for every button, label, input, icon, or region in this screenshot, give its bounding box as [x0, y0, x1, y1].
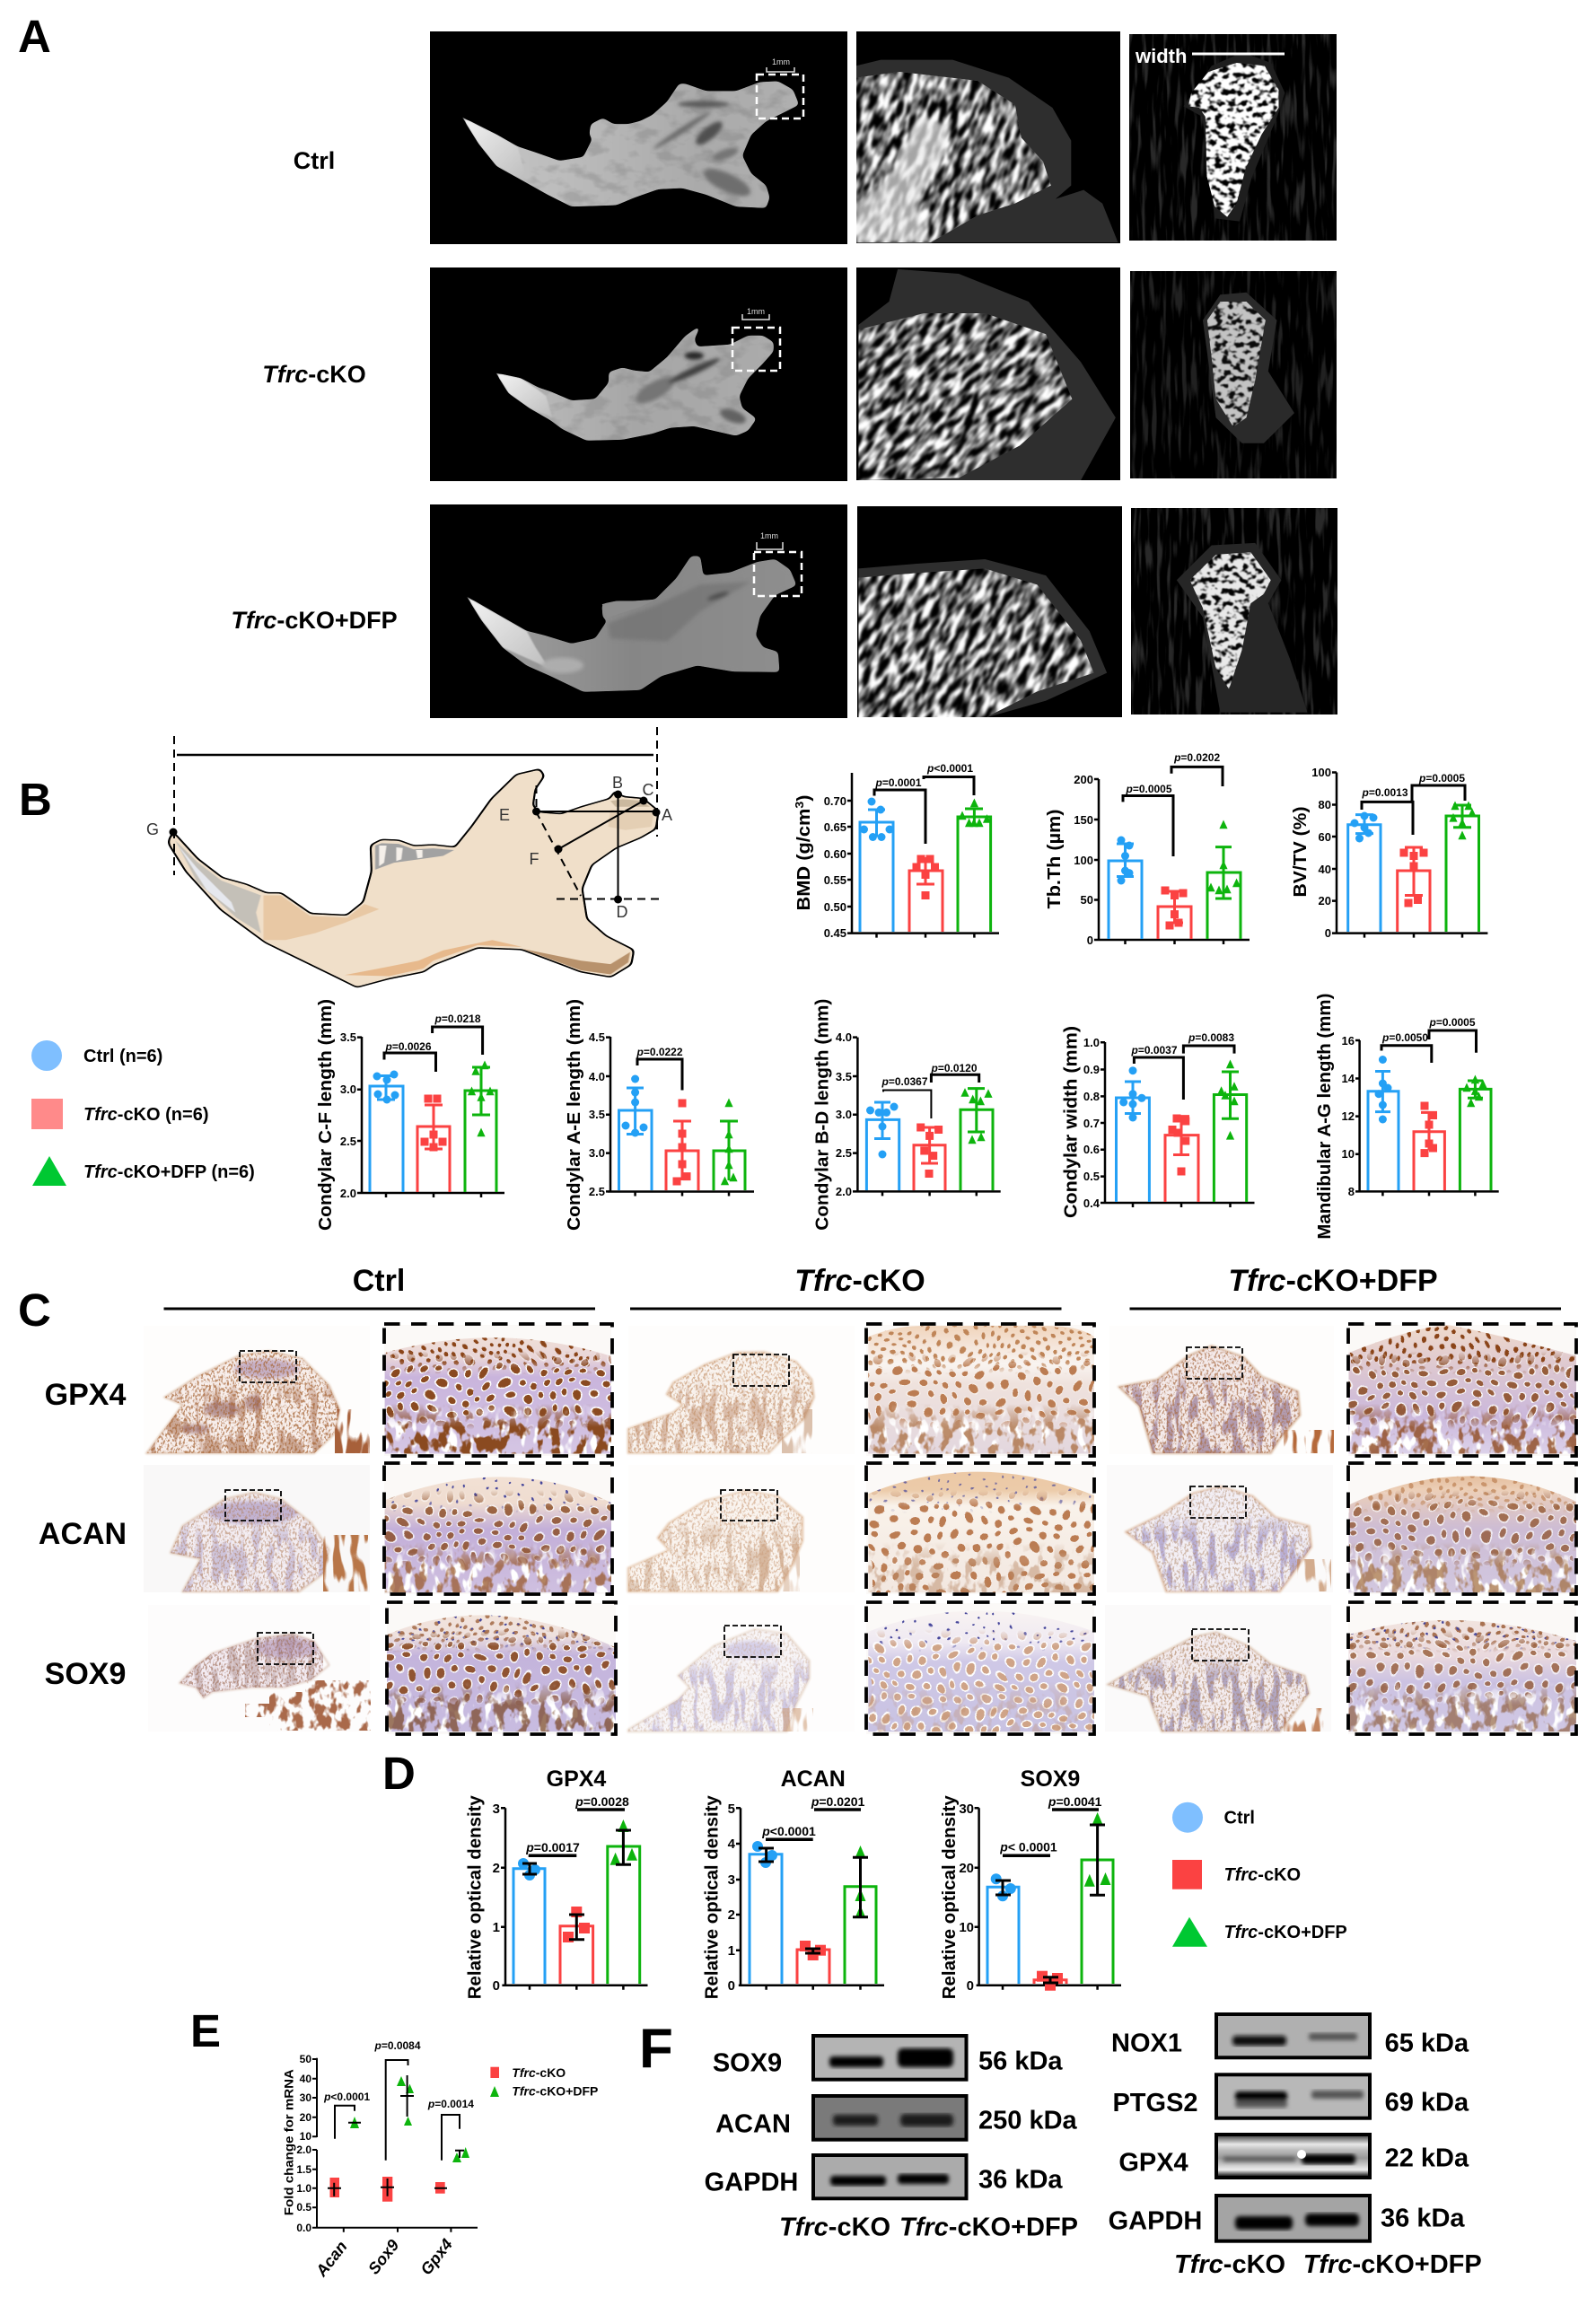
panel: B measurement diagram	[19, 727, 672, 986]
tick labels: 0.65	[824, 820, 846, 834]
tick labels: 14	[1342, 1072, 1355, 1085]
tick labels	[493, 1802, 500, 1994]
tick labels: 200	[1074, 773, 1093, 786]
y axis title: Relative optical density	[466, 1794, 486, 1999]
image: Tfrc-cKO condyle sagittal	[856, 267, 1120, 480]
SOX9 Tfrc-cKO magnified	[866, 1602, 1094, 1734]
error bars	[328, 2075, 464, 2196]
chart title: SOX9	[1021, 1767, 1080, 1792]
legend Tfrc-cKO+DFP	[32, 1156, 255, 1186]
significance brackets	[881, 1062, 979, 1118]
significance brackets: p=0.0005	[1125, 783, 1172, 795]
measurement lines and dashes	[174, 727, 664, 899]
data points	[866, 1088, 993, 1178]
legend Ctrl: Ctrl	[1224, 1809, 1255, 1828]
tick labels: 0.8	[1083, 1090, 1100, 1103]
row label: ACAN: ACAN	[39, 1517, 127, 1551]
SOX9 Tfrc-cKO+DFP magnified	[1348, 1602, 1576, 1734]
tick labels: 10	[959, 1920, 974, 1935]
tick labels: 2	[493, 1861, 500, 1876]
red data markers	[330, 2177, 445, 2202]
bars	[866, 1089, 993, 1190]
bar chart: GPX4 optical density	[466, 1767, 648, 1999]
significance bars: p=0.0041	[1048, 1794, 1102, 1809]
green data markers	[350, 2076, 469, 2162]
panel letter B: B	[19, 774, 52, 825]
landmark labels	[146, 774, 672, 921]
SOX9 Tfrc-cKO overview	[628, 1605, 855, 1732]
tick labels	[1311, 766, 1331, 940]
tick labels: 40	[1319, 863, 1331, 876]
tick labels: 4	[728, 1837, 736, 1852]
significance brackets: p=0.0202	[1173, 751, 1220, 764]
significance bracket: p=0.0222	[636, 1046, 683, 1058]
ACAN Ctrl magnified	[384, 1463, 612, 1594]
axes	[1355, 1040, 1499, 1196]
tick labels: 3	[493, 1802, 500, 1817]
tick labels: 20	[959, 1861, 974, 1876]
x axis labels	[311, 2235, 456, 2281]
blot lane labels right: Tfrc-cKO	[1174, 2250, 1285, 2279]
tick labels: 2.5	[589, 1185, 605, 1198]
significance bracket	[636, 1046, 683, 1090]
significance brackets: p=0.0014	[427, 2098, 474, 2110]
panel letter A: A	[18, 11, 51, 62]
legend: Tfrc-cKO+DFP	[512, 2084, 598, 2099]
tick labels: 2.0	[340, 1187, 356, 1200]
panel letter D: D	[382, 1748, 416, 1799]
significance brackets: p=0.0084	[373, 2039, 421, 2052]
SOX9 Tfrc-cKO+DFP overview	[1105, 1605, 1331, 1732]
legend Tfrc-cKO+DFP: Tfrc-cKO+DFP	[1224, 1923, 1347, 1942]
legend Tfrc-cKO: Tfrc-cKO (n=6)	[83, 1105, 208, 1125]
tick labels	[589, 1030, 605, 1198]
GAPDH blot right	[1109, 2194, 1465, 2243]
significance brackets: p=0.0005	[1428, 1016, 1476, 1029]
tick labels: 8	[1348, 1185, 1355, 1198]
y axis title: Condylar width (mm)	[1061, 1026, 1081, 1218]
axes	[975, 1808, 1121, 1990]
axes	[606, 1037, 754, 1196]
significance brackets: p=0.0083	[1188, 1031, 1234, 1044]
GPX4 Ctrl overview	[145, 1348, 370, 1456]
tick labels: 3	[728, 1872, 735, 1888]
tick labels: 0	[1325, 926, 1331, 940]
significance brackets: p<0.0001	[926, 762, 973, 775]
axes	[1332, 772, 1487, 938]
GPX4 blot	[1118, 2133, 1469, 2179]
significance brackets: p=0.0050	[1381, 1031, 1428, 1044]
bars	[370, 1067, 496, 1192]
error bars	[759, 1848, 868, 1953]
tick labels: 10	[1342, 1147, 1355, 1161]
significance brackets: p=0.0013	[1361, 786, 1408, 799]
axes	[357, 1037, 504, 1197]
GPX4 Tfrc-cKO+DFP overview	[1117, 1344, 1334, 1456]
legend	[490, 2065, 598, 2099]
bars	[1109, 844, 1241, 939]
data points	[1375, 1056, 1487, 1157]
y axis title: Condylar A-E length (mm)	[565, 999, 584, 1231]
ACAN Tfrc-cKO+DFP magnified	[1348, 1463, 1576, 1594]
tick labels: 3.5	[589, 1108, 605, 1121]
significance brackets: p=0.0026	[384, 1040, 432, 1053]
NOX1 blot	[1111, 2012, 1469, 2059]
data points	[860, 797, 991, 899]
bars	[1348, 805, 1479, 932]
image: Ctrl whole mandible: 1mm	[772, 57, 790, 66]
data points	[518, 1819, 637, 1942]
tick labels: 16	[1342, 1034, 1355, 1048]
NOX1 blot: 65 kDa	[1385, 2029, 1469, 2057]
tick labels: 0.55	[824, 873, 846, 887]
legend Tfrc-cKO	[31, 1099, 208, 1129]
tick labels: 3.0	[589, 1146, 605, 1160]
significance brackets: p=0.0218	[434, 1013, 481, 1025]
tick labels: 0	[967, 1978, 974, 1994]
ACAN Ctrl overview	[168, 1489, 368, 1594]
GPX4 Tfrc-cKO+DFP magnified	[1348, 1324, 1576, 1456]
row label: SOX9: SOX9	[45, 1657, 126, 1691]
landmark labels: C	[643, 781, 653, 799]
data points	[1119, 1059, 1239, 1176]
landmark labels: B	[612, 774, 623, 792]
mandible illustration	[170, 770, 657, 986]
error bars	[522, 1830, 631, 1940]
bar chart: Condylar width	[1061, 1026, 1255, 1218]
legend: panel B groups	[31, 1040, 255, 1186]
tick labels: 5	[728, 1802, 735, 1817]
tick labels: 30	[300, 2091, 311, 2104]
bars	[750, 1854, 876, 1984]
image: Tfrc-cKO whole mandible	[430, 267, 847, 481]
significance brackets	[874, 762, 974, 844]
image: Tfrc-cKO whole mandible: 1mm	[747, 307, 765, 316]
axes	[501, 1808, 648, 1990]
GPX4 blot: GPX4	[1118, 2149, 1188, 2178]
GAPDH blot left	[705, 2153, 1063, 2200]
significance bars	[761, 1794, 865, 1839]
SOX9 Ctrl magnified	[387, 1602, 616, 1734]
GPX4 Tfrc-cKO magnified	[866, 1324, 1094, 1456]
PTGS2 blot: PTGS2	[1112, 2089, 1198, 2117]
image: Ctrl condyle coronal with width bar	[1129, 34, 1337, 241]
tick labels: 4.0	[836, 1030, 852, 1044]
tick labels: 4.5	[589, 1030, 605, 1044]
SOX9 blot	[713, 2034, 1063, 2082]
blot lane labels right	[1174, 2250, 1482, 2279]
blot lane labels left	[779, 2214, 1078, 2242]
ACAN blot: 250 kDa	[978, 2106, 1078, 2135]
western blots right	[1109, 2012, 1482, 2279]
landmark labels: A	[662, 806, 672, 824]
significance brackets	[323, 2039, 474, 2161]
western blots left	[705, 2034, 1078, 2242]
ACAN Tfrc-cKO+DFP overview	[1123, 1485, 1331, 1594]
tick labels: 0.5	[1083, 1170, 1100, 1183]
tick labels	[728, 1802, 736, 1994]
bars	[1368, 1072, 1491, 1190]
legend Tfrc-cKO+DFP	[1172, 1917, 1347, 1947]
significance brackets	[1123, 751, 1223, 856]
tick labels: 0	[1087, 934, 1093, 947]
tick labels: 0	[493, 1978, 500, 1994]
tick labels: 0.50	[824, 900, 846, 914]
bar chart: Mandibular A-G length	[1315, 994, 1499, 1240]
tick labels: 1	[493, 1920, 500, 1935]
PTGS2 blot	[1112, 2073, 1469, 2120]
significance brackets	[1130, 1031, 1234, 1100]
tick labels: 2.5	[340, 1135, 356, 1148]
significance brackets: p=0.0001	[874, 776, 922, 789]
SOX9 Ctrl overview	[178, 1632, 371, 1731]
data points	[991, 1812, 1111, 1991]
bars	[619, 1088, 745, 1190]
bar chart: BV/TV	[1291, 766, 1487, 940]
row label: Ctrl: Ctrl	[294, 147, 335, 174]
y axis title: Fold change for mRNA	[282, 2069, 296, 2215]
image: Ctrl condyle sagittal	[856, 31, 1120, 243]
tick labels: 0.4	[1083, 1197, 1101, 1210]
tick labels: 0.6	[1083, 1143, 1100, 1156]
axes	[847, 773, 999, 938]
panel letter C: C	[18, 1284, 51, 1336]
tick labels: 1.0	[1083, 1036, 1100, 1049]
x axis labels: Gpx4	[417, 2235, 456, 2278]
blot lane labels left: Tfrc-cKO+DFP	[899, 2214, 1078, 2242]
GAPDH blot right: 36 kDa	[1381, 2205, 1465, 2233]
tick labels	[1342, 1034, 1355, 1198]
bar chart: Tb.Th	[1045, 751, 1250, 947]
y axis title: BMD (g/cm	[794, 817, 814, 910]
bar chart: Condylar A-E length	[565, 999, 754, 1231]
blot lane labels left: Tfrc-cKO	[779, 2214, 890, 2242]
tick labels	[824, 794, 846, 940]
tick labels: 100	[1074, 854, 1093, 867]
axes	[1101, 1042, 1255, 1207]
ACAN Tfrc-cKO overview	[627, 1488, 804, 1594]
data points	[373, 1061, 495, 1151]
significance bars	[525, 1794, 629, 1855]
significance bars: p=0.0017	[525, 1840, 580, 1854]
bars	[513, 1846, 640, 1984]
image: Ctrl condyle coronal with width bar: width	[1135, 45, 1187, 67]
GPX4 Tfrc-cKO overview	[627, 1350, 816, 1455]
GPX4 blot: 22 kDa	[1385, 2144, 1469, 2172]
legend Tfrc-cKO+DFP: Tfrc-cKO+DFP (n=6)	[83, 1162, 255, 1182]
error bars	[995, 1825, 1105, 1983]
tick labels	[296, 2053, 311, 2234]
tick labels: 2.5	[836, 1146, 852, 1160]
image: Tfrc-cKO+DFP whole mandible: 1mm	[760, 531, 778, 540]
tick labels: 0.7	[1083, 1117, 1100, 1130]
legend: panel D groups	[1172, 1802, 1347, 1947]
y axis title: Condylar B-D length (mm)	[813, 999, 833, 1231]
axes	[853, 1038, 1001, 1196]
row label: Tfrc-cKO: Tfrc-cKO	[262, 361, 366, 388]
tick labels	[340, 1030, 356, 1200]
significance brackets	[1381, 1016, 1476, 1063]
tick labels: 12	[1342, 1109, 1355, 1123]
data points	[621, 1075, 738, 1185]
bar chart: BMD	[793, 762, 999, 940]
y axis title: 3	[793, 802, 806, 809]
legend Ctrl: Ctrl (n=6)	[83, 1047, 162, 1066]
axes	[1094, 779, 1250, 944]
GAPDH blot right: GAPDH	[1109, 2206, 1202, 2235]
tick labels: 4.0	[589, 1070, 605, 1083]
broken axes	[312, 2058, 478, 2232]
row label: GPX4: GPX4	[45, 1378, 126, 1412]
GPX4 Ctrl magnified	[384, 1324, 612, 1456]
landmark labels: D	[616, 903, 628, 921]
tick labels: 50	[1081, 893, 1093, 907]
GAPDH blot left: 36 kDa	[978, 2165, 1063, 2194]
tick labels	[1074, 773, 1093, 947]
panel: C immunohistochemistry	[18, 1264, 1576, 1734]
data points	[1117, 820, 1241, 930]
image: Tfrc-cKO+DFP condyle coronal	[1131, 508, 1337, 715]
bars	[860, 809, 991, 932]
tick labels: 80	[1319, 798, 1331, 811]
chart title: GPX4	[547, 1767, 606, 1792]
column heading: Tfrc-cKO: Tfrc-cKO	[794, 1264, 925, 1298]
tick labels: 100	[1311, 766, 1331, 779]
landmark labels: F	[530, 850, 539, 868]
bar chart: ACAN optical density	[703, 1767, 884, 1999]
tick labels: 0.5	[296, 2201, 311, 2214]
image: Tfrc-cKO+DFP condyle sagittal	[857, 506, 1122, 717]
tick labels: 3.5	[340, 1030, 356, 1044]
legend Ctrl	[31, 1040, 162, 1071]
legend Ctrl	[1172, 1802, 1255, 1833]
significance brackets	[1361, 772, 1465, 835]
tick labels	[1083, 1036, 1101, 1210]
y axis title: BV/TV (%)	[1291, 806, 1311, 898]
significance bars	[999, 1794, 1102, 1855]
tick labels: 20	[1319, 894, 1331, 907]
tick labels: 0.70	[824, 794, 846, 808]
tick labels: 1.5	[296, 2163, 311, 2176]
tick labels: 60	[1319, 830, 1331, 844]
chart title: ACAN	[781, 1767, 846, 1792]
data points	[1350, 801, 1477, 907]
image: Ctrl whole mandible	[430, 31, 847, 244]
column heading: Ctrl: Ctrl	[353, 1264, 405, 1298]
tick labels: 150	[1074, 813, 1093, 827]
blot lane labels right: Tfrc-cKO+DFP	[1303, 2250, 1482, 2279]
column heading: Tfrc-cKO+DFP: Tfrc-cKO+DFP	[1228, 1264, 1438, 1298]
tick labels: 30	[959, 1802, 974, 1817]
x axis labels: Acan	[311, 2238, 351, 2281]
significance brackets: p=0.0367	[881, 1075, 928, 1088]
tick labels: 0.0	[296, 2222, 311, 2234]
y axis title: Relative optical density	[703, 1794, 723, 1999]
bar chart: Condylar B-D length	[813, 999, 1001, 1231]
PTGS2 blot: 69 kDa	[1385, 2088, 1469, 2117]
significance brackets: p=0.0005	[1418, 772, 1465, 785]
SOX9 blot: 56 kDa	[978, 2047, 1063, 2075]
landmark labels: G	[146, 820, 159, 838]
y axis title: )	[794, 795, 814, 802]
NOX1 blot: NOX1	[1111, 2029, 1182, 2057]
significance bars: p< 0.0001	[999, 1840, 1057, 1854]
tick labels	[836, 1030, 852, 1198]
x axis labels: Sox9	[364, 2236, 402, 2277]
tick labels: 2	[728, 1907, 735, 1923]
tick labels: 1.0	[296, 2182, 311, 2195]
ACAN blot	[715, 2094, 1078, 2142]
tick labels: 0	[728, 1978, 735, 1994]
landmark points	[169, 790, 661, 903]
ACAN blot: ACAN	[715, 2109, 791, 2138]
legend Tfrc-cKO	[1172, 1860, 1301, 1889]
significance brackets	[384, 1013, 483, 1072]
tick labels: 0.60	[824, 847, 846, 861]
image: Tfrc-cKO+DFP whole mandible	[430, 504, 847, 718]
legend Tfrc-cKO: Tfrc-cKO	[1224, 1865, 1301, 1885]
panel letter E: E	[190, 2005, 221, 2056]
tick labels: 2.0	[296, 2144, 311, 2156]
panel letter F: F	[639, 2018, 673, 2080]
axes	[736, 1808, 884, 1990]
bars	[1117, 1072, 1247, 1202]
significance bars: p=0.0201	[811, 1794, 865, 1809]
significance brackets: p=0.0037	[1130, 1044, 1178, 1056]
bars	[987, 1860, 1113, 1984]
GAPDH blot left: GAPDH	[705, 2169, 798, 2197]
y axis title: Mandibular A-G length (mm)	[1315, 994, 1335, 1240]
y axis title: Condylar C-F length (mm)	[316, 999, 336, 1231]
dot plot: mRNA fold change	[282, 2039, 598, 2281]
tick labels: 2.0	[836, 1185, 852, 1198]
data points	[752, 1841, 865, 1960]
tick labels	[959, 1802, 974, 1994]
significance bars: p<0.0001	[761, 1824, 816, 1838]
tick labels: 1	[728, 1943, 735, 1959]
significance bars: p=0.0028	[574, 1794, 629, 1809]
tick labels: 0.9	[1083, 1063, 1100, 1076]
ACAN Tfrc-cKO magnified	[866, 1463, 1094, 1594]
panel: A micro-CT	[19, 20, 1337, 718]
row label: Tfrc-cKO+DFP: Tfrc-cKO+DFP	[231, 607, 398, 634]
tick labels: 40	[300, 2073, 311, 2085]
tick labels: 50	[300, 2053, 311, 2065]
y axis title: Relative optical density	[940, 1794, 960, 1999]
bar chart: SOX9 optical density	[940, 1767, 1121, 1999]
legend: Tfrc-cKO	[512, 2065, 566, 2080]
SOX9 blot: SOX9	[713, 2048, 782, 2077]
tick labels: 3.0	[340, 1083, 356, 1096]
tick labels: 20	[300, 2111, 311, 2124]
tick labels: 3.5	[836, 1070, 852, 1083]
bar chart: Condylar C-F length	[316, 999, 504, 1231]
tick labels: 0.45	[824, 926, 846, 940]
y axis title: Tb.Th (µm)	[1045, 810, 1065, 908]
landmark labels: E	[499, 806, 510, 824]
significance brackets: p=0.0120	[930, 1062, 978, 1074]
tick labels: 3.0	[836, 1108, 852, 1121]
tick labels: 10	[300, 2130, 311, 2143]
image: Tfrc-cKO condyle coronal	[1130, 271, 1337, 478]
significance brackets: p<0.0001	[323, 2091, 370, 2103]
